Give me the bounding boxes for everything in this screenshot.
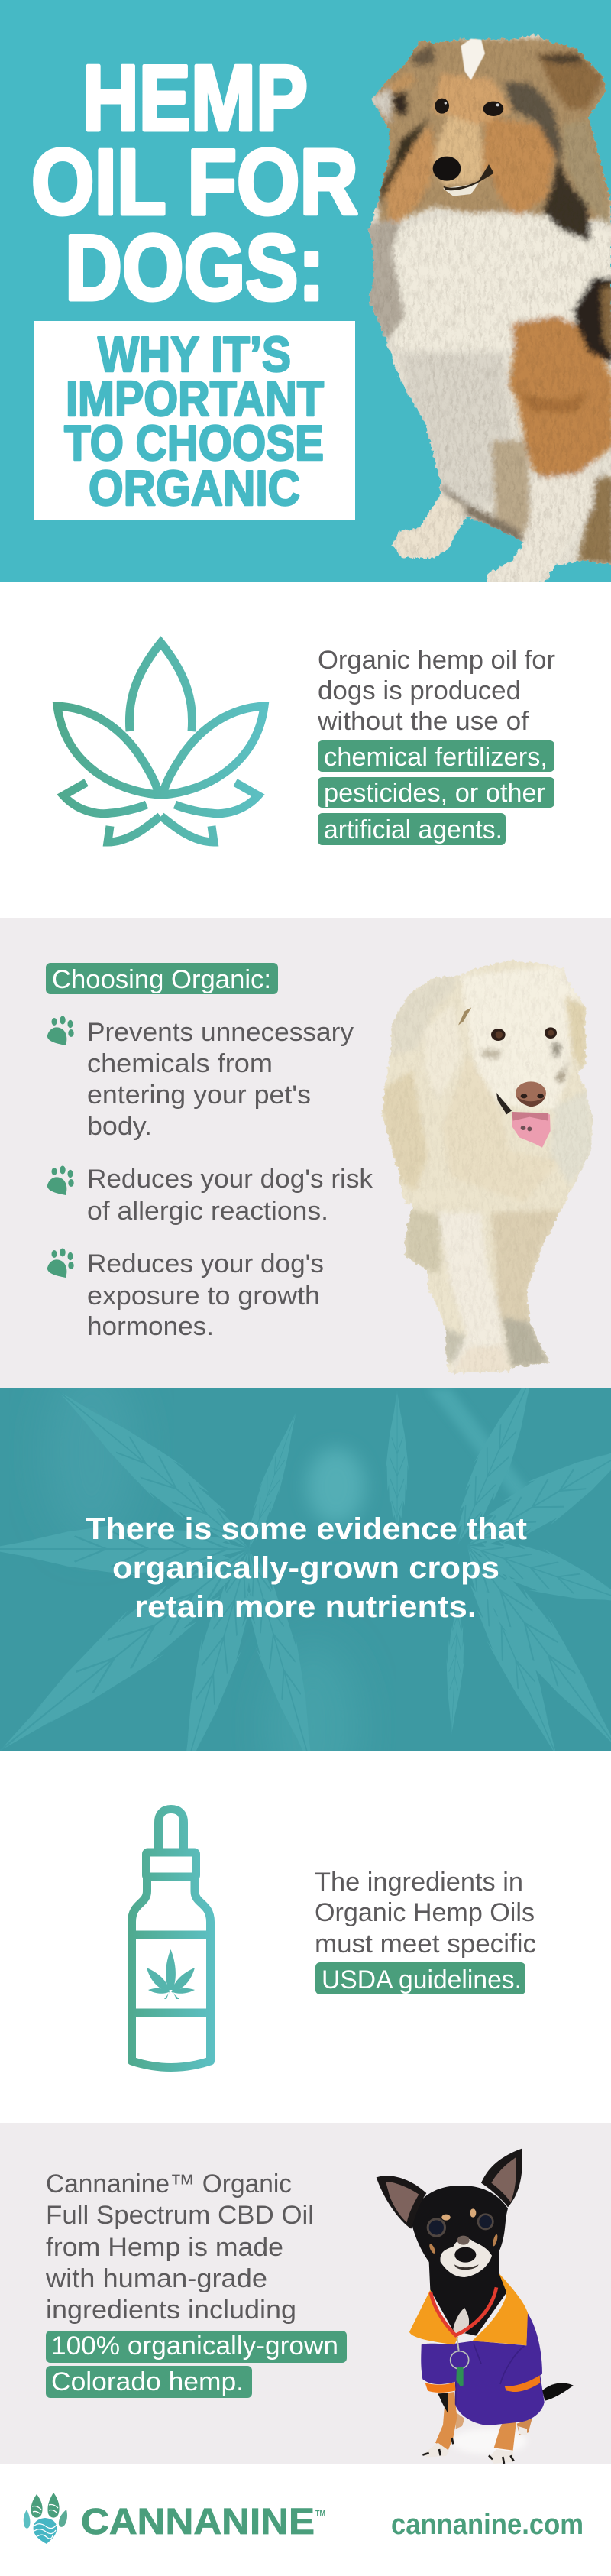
highlight: Colorado hemp: Colorado hemp. (51, 2367, 244, 2396)
photo: sheltie dog (359, 23, 611, 583)
bullet: allergic reactions: Reduces your dog's risk (87, 1165, 373, 1194)
text: website: cannanine.com (391, 2509, 584, 2541)
text: product description: Full Spectrum CBD Oil (46, 2201, 314, 2230)
text: organic definition (317, 646, 555, 736)
photo: chihuahua in polo shirt (377, 2149, 574, 2464)
icon: small hemp leaf on label (147, 1949, 195, 1999)
heading: choosing organic: Choosing Organic: (52, 965, 271, 994)
dog face details (433, 39, 503, 196)
bullet: prevents chemicals: chemicals from (87, 1049, 273, 1078)
panel: nutrients callout (0, 1388, 611, 1751)
subtitle box: IMPORTANT (66, 371, 324, 426)
highlight: pesticides: pesticides, or other (324, 779, 545, 808)
highlight: organically-grown: 100% organically-grown (51, 2331, 338, 2361)
highlight: USDA guidelines: USDA guidelines. (322, 1965, 522, 1994)
text: nutrients statement: organically-grown crops (112, 1551, 499, 1585)
text: organic definition: Organic hemp oil for (318, 646, 555, 675)
text: USDA guidelines (315, 1868, 536, 1959)
logo: Cannanine paw (24, 2493, 67, 2544)
title (31, 46, 358, 319)
panel: choosing organic (0, 918, 611, 1388)
bullet: growth hormones: hormones. (87, 1312, 214, 1341)
title: OIL FOR (31, 130, 358, 234)
text: nutrients statement: There is some evidence that (86, 1512, 527, 1546)
photo: golden retriever (380, 960, 594, 1375)
panel: organic definition (0, 582, 611, 918)
icon: paw (47, 1016, 74, 1045)
highlight: artificial agents: artificial agents. (324, 815, 503, 844)
title: DOGS: (65, 215, 325, 319)
panel: Cannanine product (0, 2123, 611, 2464)
text: product description (45, 2169, 314, 2325)
bullet: allergic reactions (47, 1165, 373, 1226)
bullet: growth hormones: exposure to growth (87, 1282, 320, 1311)
dog face details (458, 1007, 557, 1148)
panel: USDA guidelines (0, 1751, 611, 2123)
bullet: growth hormones: Reduces your dog's (87, 1249, 324, 1278)
icon: hemp leaf (57, 643, 264, 842)
text: product description: ingredients including (46, 2296, 296, 2325)
bullet: growth hormones (47, 1249, 324, 1341)
highlight: chemical fertilizers: chemical fertilizers, (324, 743, 548, 772)
subtitle box: WHY IT’S (98, 326, 291, 382)
text: product description: with human-grade (45, 2264, 267, 2293)
text: organic definition: without the use of (317, 707, 529, 736)
text: nutrients statement: retain more nutrients. (134, 1590, 477, 1624)
text: nutrients statement (86, 1512, 527, 1624)
bullet: prevents chemicals (47, 1016, 354, 1141)
icon: paw (47, 1249, 74, 1278)
bullet: allergic reactions: of allergic reactions. (87, 1197, 328, 1226)
bullet: prevents chemicals: entering your pet's (87, 1081, 311, 1110)
background: hemp leaves (0, 1360, 611, 1811)
icon: paw (47, 1166, 74, 1195)
bullet: prevents chemicals: Prevents unnecessary (87, 1018, 354, 1047)
subtitle box (34, 321, 355, 520)
text: USDA guidelines: must meet specific (315, 1930, 536, 1959)
title: HEMP (82, 46, 308, 150)
text: product description: Cannanine™ Organic (46, 2169, 292, 2199)
text: USDA guidelines: The ingredients in (315, 1868, 523, 1897)
text: organic definition: dogs is produced (318, 676, 521, 705)
subtitle box: ORGANIC (89, 460, 300, 516)
bullet: prevents chemicals: body. (87, 1112, 152, 1141)
subtitle box: TO CHOOSE (64, 415, 324, 471)
logo: Cannanine wordmark: TM (315, 2510, 325, 2518)
panel: footer (0, 2464, 611, 2576)
panel: hero (0, 0, 611, 583)
logo: Cannanine wordmark: CANNANINE (81, 2502, 315, 2542)
text: USDA guidelines: Organic Hemp Oils (315, 1898, 535, 1927)
icon: dropper bottle (131, 1810, 211, 2068)
text: product description: from Hemp is made (46, 2233, 283, 2262)
